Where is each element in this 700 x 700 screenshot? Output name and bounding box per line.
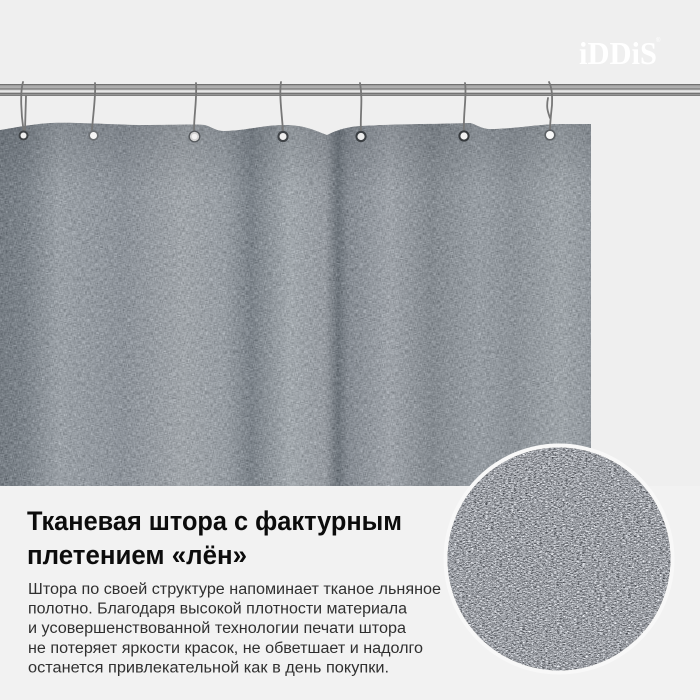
ring 4: [277, 82, 289, 142]
curtain rings and grommets: [18, 82, 556, 142]
body text: останется привлекательной как в день покупки.: [28, 660, 389, 676]
ring 3: [188, 83, 200, 142]
logo: IDDIS: iDDiS: [579, 35, 657, 71]
ring 1: [18, 82, 28, 140]
body text: полотно. Благодаря высокой плотности материала: [28, 600, 407, 618]
ring 7: [544, 82, 556, 141]
ring 2: [88, 83, 99, 141]
body text: [28, 581, 441, 676]
curtain rod: [0, 84, 700, 96]
logo: IDDIS: ®: [656, 37, 661, 44]
curtain fabric panel: [0, 123, 591, 486]
curtain top shading: [0, 123, 591, 190]
body text: Штора по своей структуре напоминает тканое льняное: [28, 581, 441, 598]
heading: Тканевая штора с фактурным: [27, 506, 402, 536]
zoomed fabric circle: [444, 444, 674, 674]
ring 6: [458, 83, 470, 142]
ring 5: [355, 83, 367, 142]
body text: не потеряет яркости красок, не обветшает и надолго: [28, 640, 423, 657]
heading: [27, 506, 402, 570]
body text: и усовершенствованной технологии печати штора: [28, 620, 406, 637]
heading: плетением «лён»: [27, 540, 247, 570]
bottom text panel: [0, 486, 700, 700]
